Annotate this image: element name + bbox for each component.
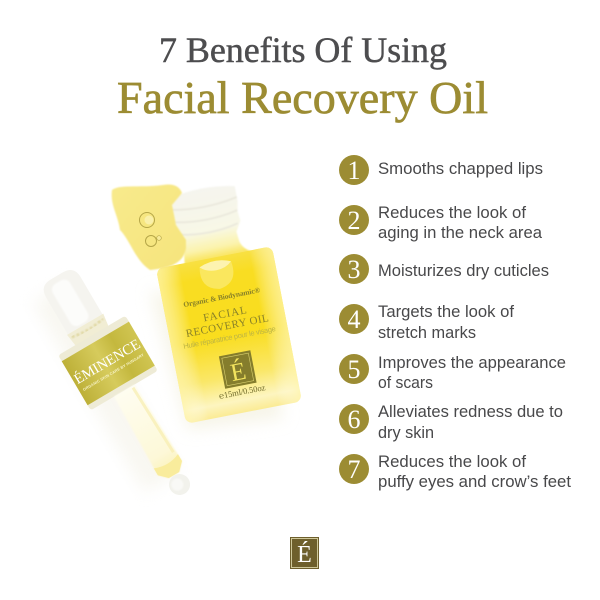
- bottle shadow: [150, 290, 285, 430]
- bottle label: Huile réparatrice pour le visage: [182, 324, 276, 351]
- bottle logo: É: [228, 357, 248, 387]
- benefit 3: [339, 254, 549, 284]
- bubble highlight: [198, 258, 236, 292]
- collar text: ORGANIC SKIN CARE BY HUNGARY: [82, 353, 145, 392]
- product: dropper: [23, 256, 218, 513]
- benefit 6: 6: [348, 405, 360, 434]
- benefit 2: 2: [348, 206, 360, 235]
- benefit 2: aging in the neck area: [378, 223, 543, 242]
- bottle label: [175, 284, 287, 406]
- bottle label: ℮15ml/0.50oz: [218, 382, 266, 401]
- benefit 7: puffy eyes and crow’s feet: [378, 472, 571, 491]
- benefit 3: Moisturizes dry cuticles: [378, 261, 549, 280]
- benefit 3: 3: [348, 255, 360, 284]
- glass tip: [165, 470, 194, 499]
- benefit 5: of scars: [378, 373, 433, 392]
- title: [117, 30, 488, 123]
- dropper shadow: [33, 282, 179, 492]
- product: bottle with oil drop: [112, 177, 302, 430]
- benefit 1: [339, 155, 543, 185]
- logo: Éminence mark: É: [297, 542, 312, 568]
- bottle label: Organic & Biodynamic®: [183, 285, 261, 309]
- glass neck: [167, 181, 251, 265]
- benefit 4: 4: [348, 305, 360, 334]
- benefit 4: stretch marks: [378, 323, 476, 342]
- benefits list: [339, 155, 571, 491]
- benefit 7: [339, 452, 571, 491]
- benefit 7: 7: [348, 455, 360, 484]
- title: 7 Benefits Of Using: [159, 30, 447, 70]
- benefit 5: [339, 353, 566, 392]
- bottle label: RECOVERY OIL: [185, 312, 270, 340]
- benefit 2: Reduces the look of: [378, 203, 526, 222]
- bottle: [143, 177, 302, 424]
- benefit 6: Alleviates redness due to: [378, 402, 563, 421]
- benefit 6: dry skin: [378, 423, 434, 442]
- oil drop: [112, 184, 186, 270]
- bottle body: [156, 246, 302, 424]
- collar text: ÉMINENCE: [71, 336, 144, 388]
- benefit 1: Smooths chapped lips: [378, 159, 543, 178]
- logo: Éminence mark: [290, 537, 319, 569]
- benefit 6: [339, 402, 563, 442]
- benefit 5: Improves the appearance: [378, 353, 566, 372]
- glass tube: [112, 383, 186, 482]
- collar: [58, 316, 158, 410]
- title: Facial Recovery Oil: [117, 72, 488, 123]
- benefit 5: 5: [348, 355, 360, 384]
- bottle label: FACIAL: [202, 304, 248, 324]
- benefit 4: Targets the look of: [378, 302, 514, 321]
- benefit 2: [339, 203, 543, 242]
- benefit 7: Reduces the look of: [378, 452, 526, 471]
- dropper neck: [67, 314, 110, 347]
- benefit 4: [339, 302, 514, 342]
- rubber bulb: [40, 266, 102, 334]
- benefit 1: 1: [348, 156, 360, 185]
